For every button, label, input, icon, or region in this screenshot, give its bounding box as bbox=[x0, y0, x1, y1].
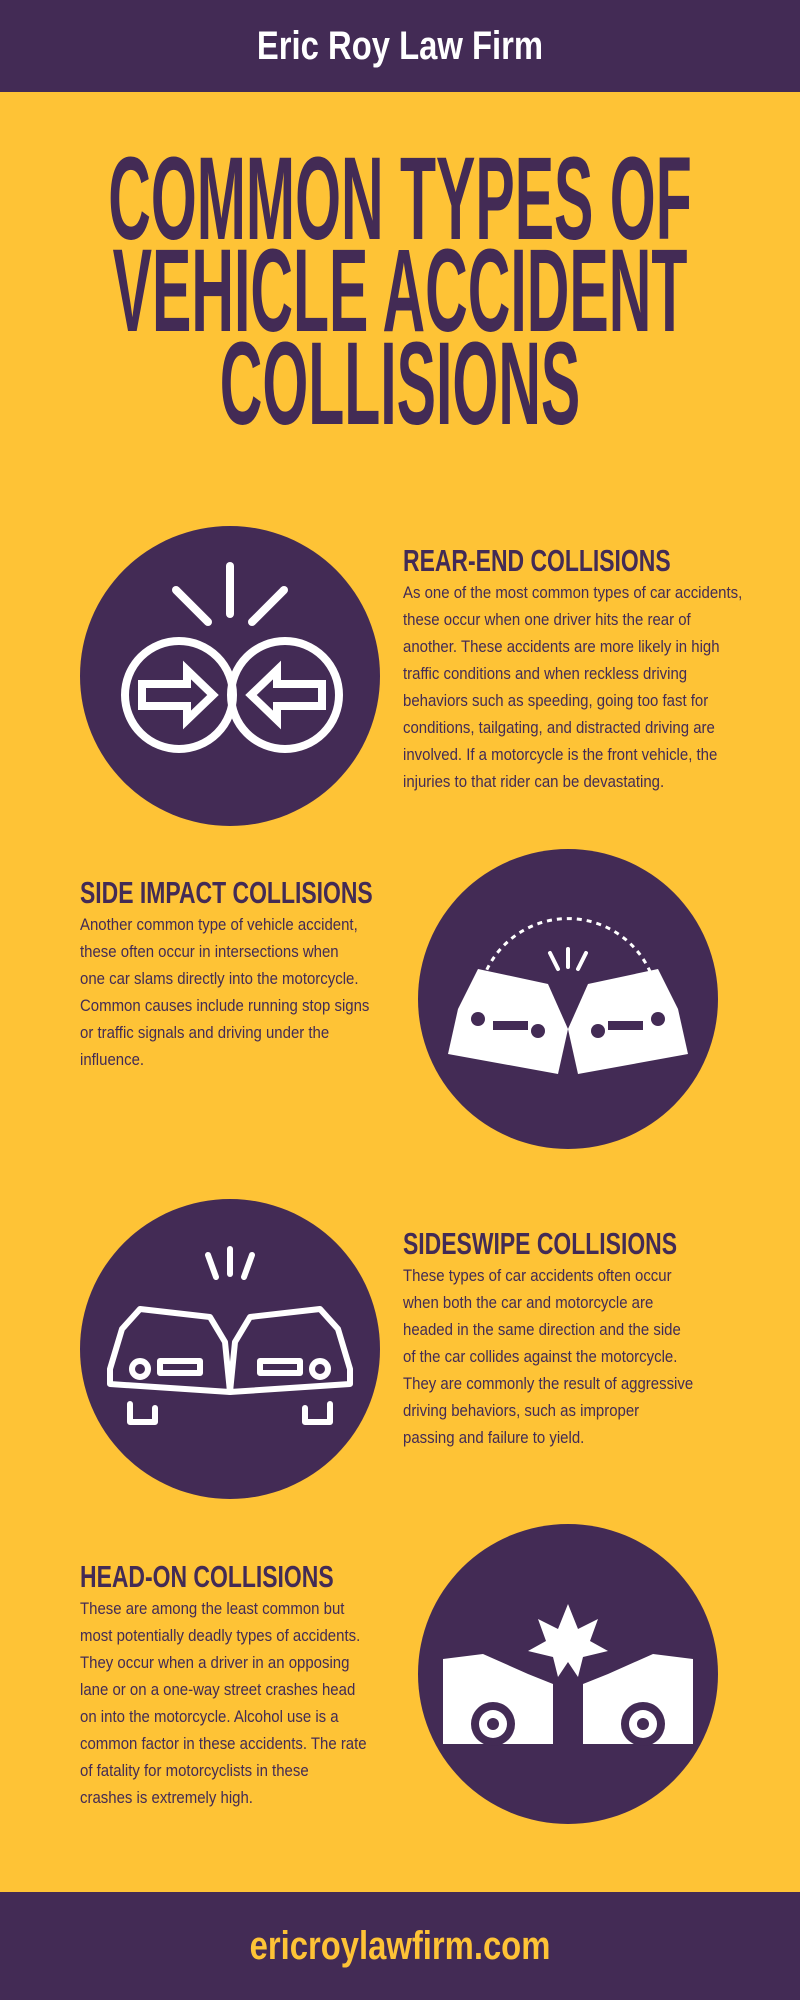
text: head-on: HEAD-ON COLLISIONS bbox=[80, 1559, 334, 1594]
footer bar bbox=[0, 1892, 800, 2000]
text: side impact: or traffic signals and driving under the bbox=[80, 1023, 329, 1042]
text: side impact: SIDE IMPACT COLLISIONS bbox=[80, 875, 373, 910]
text: head-on bbox=[80, 1559, 367, 1807]
text: side impact: Common causes include running stop signs bbox=[80, 996, 369, 1015]
text: sideswipe: These types of car accidents often occur bbox=[403, 1266, 672, 1285]
title bbox=[108, 133, 692, 450]
text: side impact bbox=[80, 875, 373, 1069]
text: sideswipe bbox=[403, 1226, 693, 1447]
text: head-on: They occur when a driver in an opposing bbox=[80, 1653, 349, 1672]
text: sideswipe: driving behaviors, such as improper bbox=[403, 1401, 639, 1420]
text: sideswipe: SIDESWIPE COLLISIONS bbox=[403, 1226, 677, 1261]
title: COLLISIONS bbox=[220, 318, 580, 450]
text: rear-end: As one of the most common types of car accidents, bbox=[403, 583, 742, 602]
text: head-on: common factor in these accidents. The rate bbox=[80, 1734, 367, 1753]
text: head-on: crashes is extremely high. bbox=[80, 1788, 253, 1807]
text: head-on: most potentially deadly types of accidents. bbox=[80, 1626, 360, 1645]
title: VEHICLE ACCIDENT bbox=[113, 225, 687, 357]
icon: head-on bbox=[418, 1524, 718, 1824]
text: head-on: of fatality for motorcyclists in these bbox=[80, 1761, 309, 1780]
icon: side impact bbox=[418, 849, 718, 1149]
text: side impact: Another common type of vehicle accident, bbox=[80, 915, 358, 934]
text: rear-end: conditions, tailgating, and distracted driving are bbox=[403, 718, 715, 737]
text: rear-end bbox=[403, 543, 742, 791]
footer bar: ericroylawfirm.com bbox=[250, 1924, 550, 1968]
text: rear-end: REAR-END COLLISIONS bbox=[403, 543, 671, 578]
text: sideswipe: headed in the same direction and the side bbox=[403, 1320, 681, 1339]
icon: rear-end bbox=[80, 526, 380, 826]
text: rear-end: behaviors such as speeding, going too fast for bbox=[403, 691, 708, 710]
text: rear-end: traffic conditions and when reckless driving bbox=[403, 664, 687, 683]
text: head-on: These are among the least common but bbox=[80, 1599, 344, 1618]
text: side impact: one car slams directly into the motorcycle. bbox=[80, 969, 359, 988]
text: rear-end: injuries to that rider can be devastating. bbox=[403, 772, 664, 791]
text: rear-end: these occur when one driver hits the rear of bbox=[403, 610, 691, 629]
text: sideswipe: of the car collides against the motorcycle. bbox=[403, 1347, 677, 1366]
text: rear-end: involved. If a motorcycle is the front vehicle, the bbox=[403, 745, 717, 764]
text: sideswipe: passing and failure to yield. bbox=[403, 1428, 584, 1447]
title: COMMON TYPES OF bbox=[108, 133, 692, 265]
text: head-on: lane or on a one-way street crashes head bbox=[80, 1680, 355, 1699]
header bar: Eric Roy Law Firm bbox=[257, 24, 543, 68]
text: sideswipe: They are commonly the result of aggressive bbox=[403, 1374, 693, 1393]
text: side impact: influence. bbox=[80, 1050, 144, 1069]
icon: sideswipe bbox=[80, 1199, 380, 1499]
text: head-on: on into the motorcycle. Alcohol use is a bbox=[80, 1707, 339, 1726]
text: sideswipe: when both the car and motorcycle are bbox=[403, 1293, 653, 1312]
header bar bbox=[0, 0, 800, 92]
text: side impact: these often occur in intersections when bbox=[80, 942, 339, 961]
text: rear-end: another. These accidents are more likely in high bbox=[403, 637, 720, 656]
